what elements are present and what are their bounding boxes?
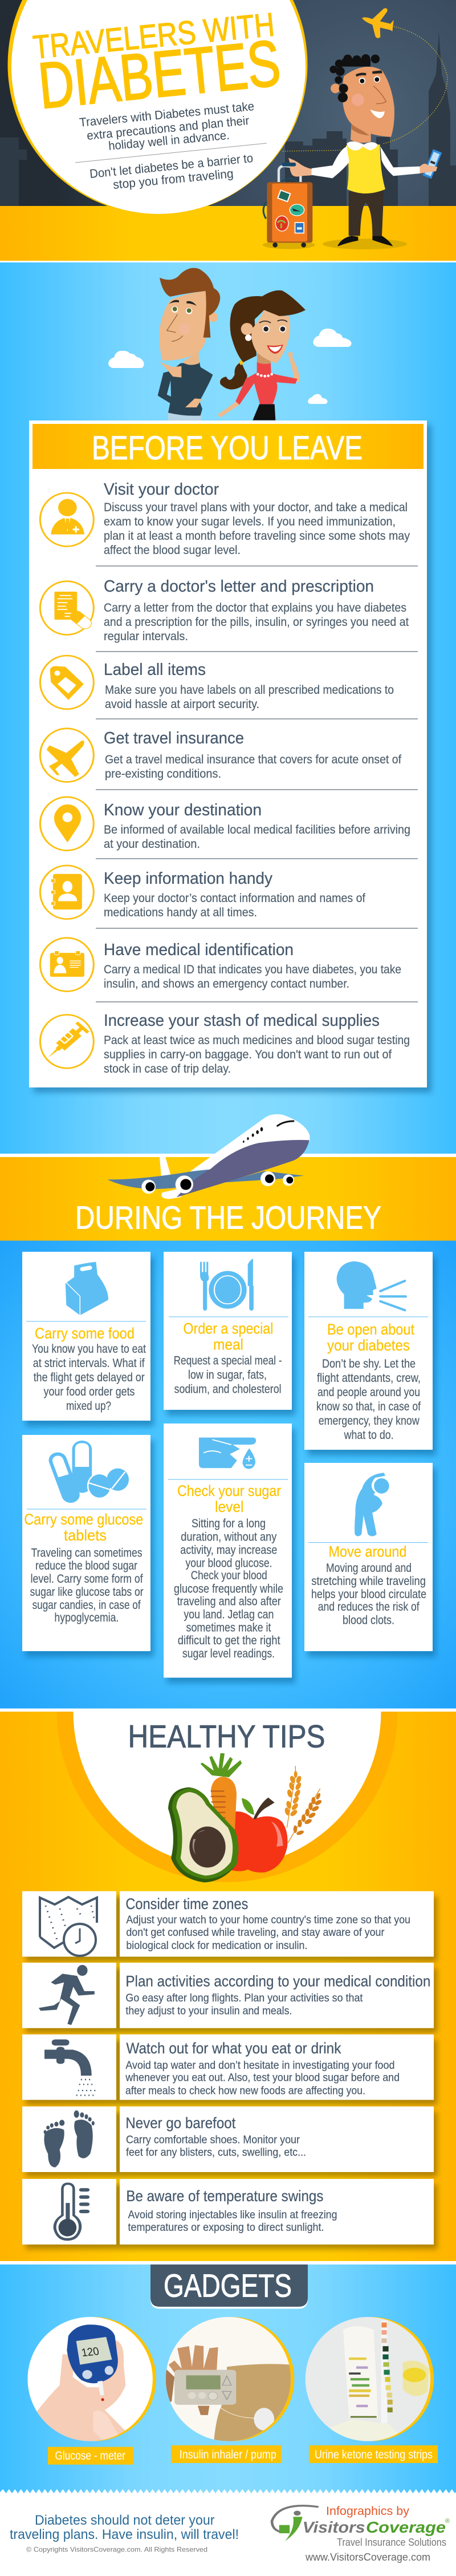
label: glucose meter — [48, 2447, 133, 2465]
text: activity, may increase — [180, 1544, 277, 1556]
text: your blood glucose. — [186, 1556, 272, 1570]
intro text: holiday well in advance. — [108, 128, 230, 153]
closing message: Diabetes should not deter your — [35, 2513, 215, 2528]
text: helps your blood circulate — [311, 1588, 426, 1601]
text: Plan activities according to your medical condition — [125, 1973, 430, 1990]
text: biological clock for medication or insulin. — [126, 1939, 307, 1952]
photo illustration: glucose meter — [27, 2317, 156, 2443]
yellow background — [0, 1712, 456, 2261]
item: keep information handy: medications handy at all times. — [104, 906, 257, 919]
text: feet for any blisters, cuts, swelling, etc... — [126, 2146, 306, 2159]
city skyline — [0, 32, 456, 207]
icon: location pin — [40, 797, 93, 851]
item: travel insurance: pre-existing conditions. — [105, 767, 221, 781]
item: know your destination — [104, 801, 410, 851]
item: doctor's letter: Carry a letter from the doctor that explains you have diabetes — [104, 601, 406, 614]
text: sodium, and cholesterol — [174, 1383, 282, 1396]
text: they adjust to your insulin and meals. — [125, 2005, 292, 2017]
title — [31, 6, 283, 123]
text — [174, 1482, 283, 1660]
text: at strict intervals. What if — [33, 1357, 145, 1370]
text: don't get confused while traveling, and stay aware of your — [126, 1926, 385, 1939]
logo text: Travel Insurance Solutions — [337, 2537, 446, 2548]
heading band: BEFORE YOU LEAVE — [92, 430, 363, 467]
item: doctor's letter: Carry a doctor's letter and prescription — [104, 577, 374, 596]
panel: before you leave — [29, 420, 427, 1087]
text: the flight gets delayed or — [34, 1371, 145, 1384]
photo illustration: glucose meter: 120 — [80, 2345, 100, 2359]
text — [174, 1320, 282, 1396]
title: TRAVELERS WITH — [31, 6, 276, 66]
text: traveling and also after — [177, 1595, 281, 1608]
item: visit your doctor: plan it at least a month before traveling since some shots may — [104, 529, 410, 543]
card: move around — [304, 1463, 433, 1651]
icon: speaking head — [337, 1261, 406, 1310]
item: medical identification — [104, 941, 401, 990]
item: visit your doctor: Visit your doctor — [104, 480, 219, 499]
sky section — [0, 262, 456, 1154]
text: and reduces the risk of — [318, 1600, 420, 1613]
healthy tips section — [0, 1712, 456, 2261]
item: visit your doctor: exam to know your sugar levels. If you need immunization, — [104, 515, 396, 528]
traveler with suitcase illustration — [89, 8, 447, 321]
text — [32, 1325, 146, 1413]
tip: consider time zones — [22, 1891, 434, 1957]
text: Moving around and — [326, 1562, 412, 1575]
heading band — [32, 424, 424, 469]
text: your food order gets — [43, 1385, 135, 1398]
text: Don’t be shy. Let the — [322, 1357, 416, 1370]
item: know your destination: at your destination. — [104, 838, 200, 851]
text: Request a special meal - — [174, 1354, 282, 1367]
logo text: Visitors — [303, 2518, 365, 2536]
icon: plane — [40, 729, 93, 782]
text: Consider time zones — [125, 1895, 248, 1912]
icon: doctor — [40, 493, 93, 547]
logo text: Infographics by — [326, 2505, 410, 2518]
item: doctor's letter: regular intervals. — [104, 630, 188, 643]
blue background — [0, 1240, 456, 1708]
tip: watch what you eat — [22, 2035, 434, 2100]
icon: map and clock — [40, 1897, 97, 1956]
item: label all items: Label all items — [104, 661, 206, 679]
item: medical supplies — [104, 1012, 410, 1075]
item: medical identification: insulin, and shows an emergency contact number. — [104, 977, 349, 990]
icon: runner — [39, 1965, 95, 2025]
label: glucose meter: Glucose - meter — [55, 2449, 125, 2462]
text: low in sugar, fats, — [188, 1368, 267, 1382]
text: you land. Jetlag can — [184, 1608, 274, 1621]
label: insulin pump — [171, 2445, 281, 2463]
closing message — [10, 2513, 239, 2542]
header panel — [0, 0, 456, 321]
logo text — [303, 2505, 450, 2563]
card: check your sugar level — [164, 1424, 292, 1677]
logo text: ® — [445, 2518, 450, 2525]
intro text — [79, 99, 255, 153]
item: know your destination: Be informed of available local medical facilities before arriving — [104, 823, 410, 836]
item: medical supplies: Pack at least twice as much medicines and blood sugar testing — [104, 1034, 410, 1047]
text — [125, 2114, 306, 2159]
logo text: www.VisitorsCoverage.com — [305, 2551, 430, 2563]
item: travel insurance — [104, 729, 401, 781]
intro text: Travelers with Diabetes must take — [79, 99, 255, 130]
sky background — [0, 262, 456, 1154]
title circle — [8, 0, 308, 215]
text — [125, 1895, 410, 1952]
item: label all items — [104, 661, 394, 711]
icon: finger blood drop — [199, 1438, 256, 1469]
text: Go easy after long flights. Plan your activities so that — [125, 1992, 363, 2004]
text: know so that, in case of — [316, 1400, 421, 1413]
text: level — [215, 1498, 244, 1515]
photo illustration: insulin pump — [166, 2317, 294, 2443]
icon: id card — [40, 938, 93, 991]
item: medical identification: Have medical identification — [104, 941, 294, 959]
text: Check your blood — [191, 1569, 267, 1582]
text: Never go barefoot — [125, 2114, 236, 2132]
item: label all items: Make sure you have labels on all prescribed medications to — [105, 684, 394, 697]
tip: never go barefoot — [22, 2106, 434, 2172]
airplane illustration — [107, 1114, 310, 1199]
intro text: extra precautions and plan their — [86, 114, 250, 143]
text: You know you have to eat — [32, 1342, 146, 1356]
call to action text: stop you from traveling — [112, 167, 234, 192]
text: level. Carry some form of — [31, 1572, 143, 1586]
during the journey band — [0, 1157, 456, 1241]
closing message: traveling plans. Have insulin, will travel! — [10, 2527, 239, 2542]
text — [126, 2187, 337, 2234]
text: Watch out for what you eat or drink — [126, 2040, 341, 2057]
night sky background — [0, 0, 456, 207]
item: know your destination: Know your destination — [104, 801, 262, 819]
icon: stretching person — [355, 1473, 389, 1536]
item: medical supplies: stock in case of trip delay. — [104, 1062, 231, 1075]
card: glucose tablets — [22, 1435, 150, 1651]
item: visit your doctor: Discuss your travel plans with your doctor, and take a medical — [104, 501, 408, 514]
panel shadow — [34, 425, 431, 1093]
card: be open about your diabetes — [304, 1252, 433, 1450]
heading: during the journey: DURING THE JOURNEY — [75, 1199, 381, 1236]
item: travel insurance: Get a travel medical insurance that covers for acute onset of — [105, 753, 401, 766]
text: Check your sugar — [177, 1482, 281, 1499]
text: reduce the blood sugar — [35, 1559, 137, 1572]
text: Move around — [328, 1543, 407, 1560]
icon: pills — [46, 1441, 129, 1505]
text: Carry some glucose — [24, 1511, 143, 1528]
tip: plan activities — [22, 1963, 434, 2028]
text: sugar like glucose tabs or — [30, 1586, 144, 1599]
couple illustration — [108, 268, 352, 420]
icon: faucet — [44, 2040, 96, 2095]
item: medical identification: Carry a medical ID that indicates you have diabetes, you take — [104, 963, 401, 976]
logo mark — [272, 2506, 319, 2541]
illustration: healthy food — [168, 1753, 323, 1882]
text: Traveling can sometimes — [31, 1546, 142, 1560]
photo illustration: ketone strips — [306, 2317, 434, 2443]
copyright: © Copyrights VisitorsCoverage.com. All Rights Reserved — [26, 2546, 207, 2554]
text: and people around you — [317, 1386, 420, 1399]
text: duration, without any — [181, 1530, 277, 1544]
heading: healthy tips: HEALTHY TIPS — [128, 1718, 325, 1754]
text: after meals to check how new foods are affecting you. — [125, 2085, 365, 2097]
text — [316, 1321, 421, 1442]
text: mixed up? — [66, 1400, 111, 1413]
text: Carry comfortable shoes. Monitor your — [126, 2134, 300, 2146]
icon: letter and pill — [40, 581, 93, 634]
item: visit your doctor: affect the blood sugar level. — [104, 544, 241, 557]
card: order a special meal — [164, 1252, 292, 1410]
heading tab: GADGETS — [164, 2268, 292, 2304]
sky background — [0, 2264, 456, 2494]
text: Sitting for a long — [192, 1517, 266, 1530]
title: DIABETES — [35, 27, 283, 123]
item: visit your doctor — [104, 480, 410, 557]
text — [125, 2040, 400, 2097]
icon: syringe — [40, 1015, 93, 1068]
item: medical supplies: Increase your stash of medical supplies — [104, 1012, 380, 1030]
text: tablets — [64, 1527, 107, 1544]
label: ketone strips: Urine ketone testing strips — [315, 2448, 433, 2461]
text: whenever you eat out. Also, test your blood sugar before and — [125, 2072, 400, 2084]
item: keep information handy: Keep information handy — [104, 870, 272, 888]
text: temperatures or exposing to direct sunlight. — [128, 2221, 324, 2234]
icon: footprints — [44, 2110, 95, 2167]
text: your diabetes — [327, 1337, 410, 1354]
item: keep information handy: Keep your doctor’s contact information and names of — [104, 892, 365, 905]
label: ketone strips — [309, 2445, 438, 2463]
arch — [57, 1712, 398, 1882]
item: medical supplies: supplies in carry-on baggage. You don't want to run out of — [104, 1048, 392, 1061]
icon: contact book — [40, 866, 93, 919]
ground band — [0, 206, 456, 261]
card: carry some food — [22, 1252, 150, 1421]
icon: thermometer — [54, 2183, 89, 2241]
text: Avoid tap water and don’t hesitate in investigating your food — [125, 2059, 394, 2072]
text: Order a special — [183, 1320, 273, 1337]
icon: food bag — [66, 1262, 108, 1315]
text: Be open about — [327, 1321, 414, 1338]
text: glucose frequently while — [174, 1583, 283, 1595]
text: Be aware of temperature swings — [126, 2187, 323, 2205]
gadgets section — [0, 2264, 456, 2494]
text: sugar level readings. — [182, 1647, 275, 1660]
footer — [10, 2505, 450, 2563]
logo text: Coverage — [366, 2518, 446, 2536]
text: Avoid storing injectables like insulin at freezing — [128, 2209, 337, 2221]
icon: plate and cutlery — [200, 1259, 254, 1311]
text: flight attendants, crew, — [317, 1372, 421, 1385]
text: Adjust your watch to your home country's time zone so that you — [126, 1914, 410, 1926]
zigzag edge — [0, 2489, 456, 2494]
text: meal — [213, 1336, 243, 1353]
text: sometimes make it — [186, 1621, 271, 1634]
text: stretching while traveling — [311, 1575, 426, 1588]
text: difficult to get the right — [178, 1634, 280, 1647]
label: insulin pump: Insulin inhaler / pump — [180, 2448, 276, 2461]
item: doctor's letter: and a prescription for the pills, insulin, or syringes you need at — [104, 616, 409, 629]
text — [311, 1543, 426, 1627]
item: keep information handy — [104, 870, 365, 919]
tip: temperature swings — [22, 2179, 434, 2245]
text: hypoglycemia. — [54, 1611, 119, 1624]
text: emergency, they know — [319, 1414, 420, 1427]
text: blood clots. — [343, 1614, 394, 1627]
text — [125, 1973, 430, 2017]
text — [24, 1511, 144, 1624]
call to action text — [89, 151, 254, 192]
card shadows — [26, 1257, 436, 1683]
journey section — [0, 1240, 456, 1708]
call to action text: Don't let diabetes be a barrier to — [89, 151, 254, 181]
item: travel insurance: Get travel insurance — [104, 729, 244, 747]
text: what to do. — [344, 1429, 394, 1442]
item: label all items: avoid hassle at airport security. — [105, 698, 259, 711]
text: Carry some food — [35, 1325, 135, 1342]
text: sugar candies, in case of — [32, 1599, 141, 1612]
icon: tag — [40, 656, 93, 709]
item: doctor's letter — [104, 577, 409, 643]
tip rows shadow — [26, 1896, 437, 2249]
